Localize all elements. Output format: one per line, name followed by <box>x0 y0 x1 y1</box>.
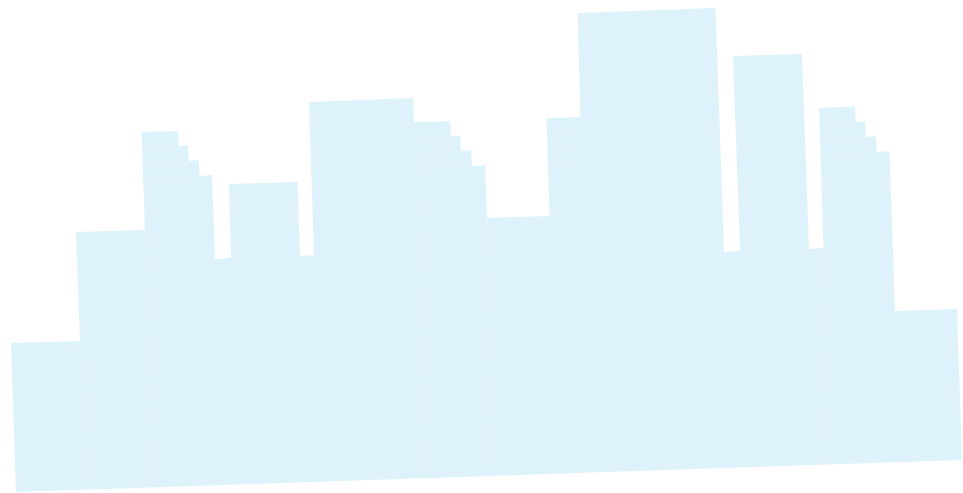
faint seams between bars <box>80 122 876 490</box>
